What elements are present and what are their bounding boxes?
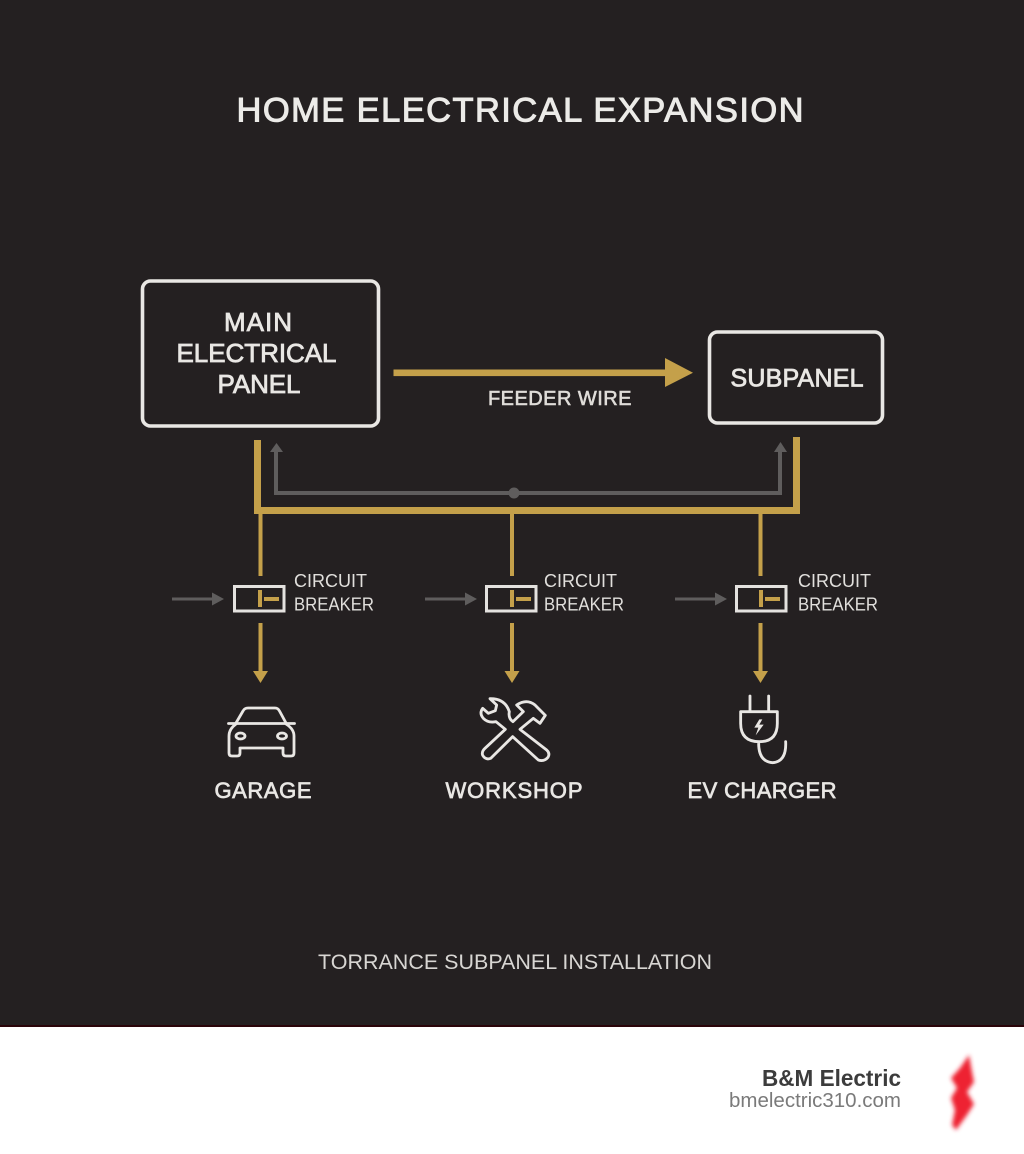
arrow: incoming bbox=[172, 592, 224, 606]
arrow: incoming bbox=[675, 592, 727, 606]
branch: EV charger circuit bbox=[675, 514, 878, 683]
EV charger label: EV CHARGER bbox=[688, 778, 836, 803]
main panel label: PANEL bbox=[218, 369, 300, 399]
garage label: GARAGE bbox=[214, 778, 312, 803]
main panel label: ELECTRICAL bbox=[176, 338, 336, 368]
panel: main electrical panel bbox=[142, 281, 378, 426]
circuit breaker label: BREAKER bbox=[544, 594, 624, 614]
circuit breaker label bbox=[798, 571, 878, 614]
caption: TORRANCE SUBPANEL INSTALLATION bbox=[318, 951, 712, 974]
branch: workshop circuit bbox=[425, 514, 624, 683]
arrow: to EV charger bbox=[753, 623, 768, 683]
main panel label: MAIN bbox=[224, 307, 292, 337]
circuit breaker label: BREAKER bbox=[294, 594, 374, 614]
circuit breaker label: CIRCUIT bbox=[798, 571, 871, 591]
title: HOME ELECTRICAL EXPANSION bbox=[236, 92, 804, 130]
panel: subpanel bbox=[710, 332, 882, 423]
arrow: feeder wire bbox=[394, 358, 693, 387]
subpanel label: SUBPANEL bbox=[730, 364, 864, 392]
icon: EV plug bbox=[741, 696, 786, 763]
main panel label bbox=[176, 307, 336, 399]
icon: car bbox=[228, 708, 294, 756]
circuit breaker switch bbox=[486, 586, 536, 611]
arrow: to garage bbox=[253, 623, 268, 683]
icon: red lightning logo bbox=[951, 1055, 974, 1130]
circuit breaker label: BREAKER bbox=[798, 594, 878, 614]
circuit breaker switch bbox=[234, 586, 284, 611]
footer brand name: B&M Electric bbox=[762, 1065, 901, 1091]
gray return line with arrows bbox=[270, 442, 787, 498]
gold bus bar bbox=[258, 437, 796, 510]
branch: garage circuit bbox=[172, 514, 374, 683]
footer website: bmelectric310.com bbox=[729, 1090, 901, 1112]
feeder wire label: FEEDER WIRE bbox=[488, 388, 632, 410]
icon: wrench and hammer bbox=[481, 699, 549, 761]
arrow: incoming bbox=[425, 592, 477, 606]
arrow: to workshop bbox=[504, 623, 520, 683]
circuit breaker switch bbox=[736, 586, 786, 611]
workshop label: WORKSHOP bbox=[446, 778, 582, 803]
circuit breaker label: CIRCUIT bbox=[294, 571, 367, 591]
circuit breaker label: CIRCUIT bbox=[544, 571, 617, 591]
circuit breaker label bbox=[544, 571, 624, 614]
circuit breaker label bbox=[294, 571, 374, 614]
